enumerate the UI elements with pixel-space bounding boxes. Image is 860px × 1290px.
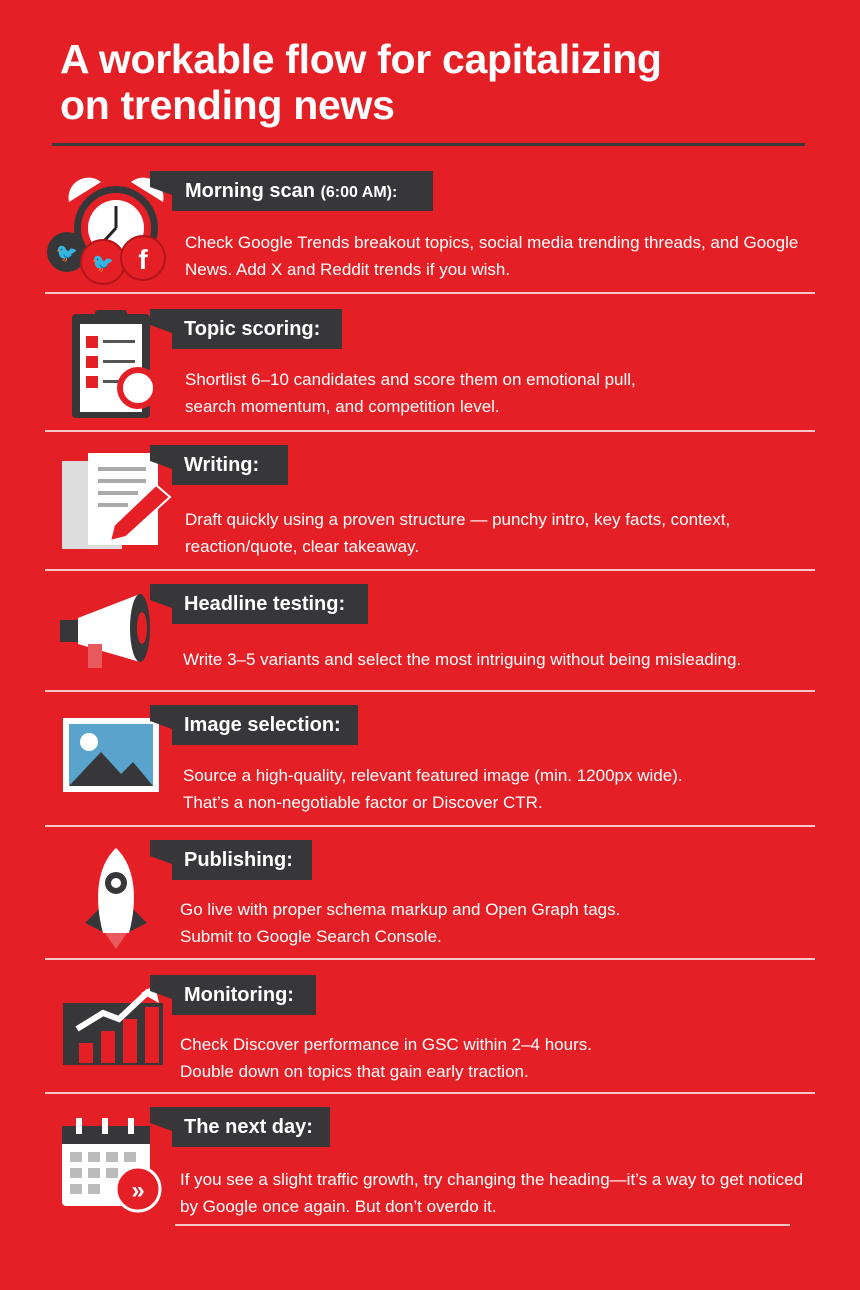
text: topic scoring: Shortlist 6–10 candidates and score them on emotional pull, [185,370,636,389]
icon: calendar with arrow [62,1118,162,1212]
tab: writing [150,445,288,485]
tab: monitoring: Monitoring: [184,984,294,1006]
tab: headline testing: Headline testing: [184,593,345,615]
icon: calendar with arrow: » [131,1177,145,1204]
text: monitoring [180,1035,592,1081]
text: writing: reaction/quote, clear takeaway. [185,537,419,556]
text: writing: Draft quickly using a proven structure — punchy intro, key facts, context, [185,510,730,529]
section: monitoring [63,975,592,1081]
text: topic scoring: search momentum, and competition level. [185,397,500,416]
section: publishing [85,840,620,949]
text: image selection: That’s a non-negotiable factor or Discover CTR. [183,793,543,812]
text: publishing [180,900,620,946]
title [60,36,662,128]
tab: next day: The next day: [184,1116,313,1138]
title: on trending news [60,82,395,128]
text: morning scan: Check Google Trends breakout topics, social media trending threads, and Google News. Add X and Reddit trends if you wish. [185,233,798,279]
text: monitoring: Check Discover performance in GSC within 2–4 hours. [180,1035,592,1054]
icon: alarm clock with social: 🐦 [56,243,78,263]
icon: document with pencil [62,453,172,549]
icon: alarm clock with social: f [138,244,148,275]
icon: alarm clock with social [47,178,166,285]
text: next day [180,1170,803,1216]
text: headline testing: Write 3–5 variants and select the most intriguing without being misleading. [183,650,741,669]
text: publishing: Go live with proper schema markup and Open Graph tags. [180,900,620,919]
icon: growth chart [63,988,163,1065]
tab: image selection [150,705,358,745]
tab: next day [150,1107,330,1147]
icon: checklist with magnifier [72,310,153,418]
tab: headline testing [150,584,368,624]
tab: topic scoring: Topic scoring: [184,318,320,340]
tab: writing: Writing: [184,454,259,476]
tab: morning scan: Morning scan (6:00 AM): [185,180,397,202]
icon: picture [63,718,159,792]
icon: megaphone [60,594,150,668]
section: morning scan [47,171,798,285]
text: image selection: Source a high-quality, relevant featured image (min. 1200px wide). [183,766,683,785]
text: next day: If you see a slight traffic growth, try changing the heading—it’s a way to get noticed [180,1170,803,1189]
tab: monitoring [150,975,316,1015]
section: next day [62,1107,803,1216]
icon: alarm clock with social: 🐦 [92,253,114,273]
icon: rocket [85,848,147,949]
tab: publishing: Publishing: [184,849,293,871]
text: writing [185,510,730,556]
tab: publishing [150,840,312,880]
tab: topic scoring [150,309,342,349]
section: image selection [63,705,683,812]
section: writing [62,445,730,556]
section: headline testing [60,584,741,669]
text: next day: by Google once again. But don’t overdo it. [180,1197,497,1216]
text: monitoring: Double down on topics that gain early traction. [180,1062,529,1081]
title: A workable flow for capitalizing [60,36,662,82]
text: topic scoring [185,370,636,416]
tab: morning scan [150,171,433,211]
tab: image selection: Image selection: [184,714,341,736]
text: publishing: Submit to Google Search Console. [180,927,442,946]
section: topic scoring [72,309,636,418]
text: image selection [183,766,683,812]
